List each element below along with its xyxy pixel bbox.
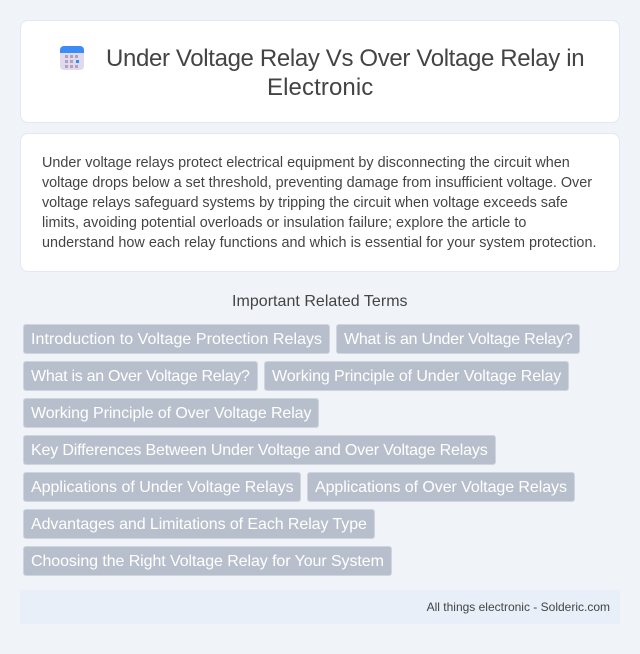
tag [23,398,319,428]
tag: Applications of Under Voltage Relays [31,479,294,496]
intro text: voltage drops below a set threshold, preventing damage from insufficient voltage. Over [42,175,592,191]
tag: Working Principle of Under Voltage Relay [272,368,561,385]
tag: What is an Over Voltage Relay? [31,368,250,385]
tag: Advantages and Limitations of Each Relay Type [31,516,367,533]
intro text: limits, avoiding potential overloads or insulation failure; explore the article to [42,215,526,231]
tag: Choosing the Right Voltage Relay for Your System [31,553,384,570]
tag: Key Differences Between Under Voltage and Over Voltage Relays [31,442,488,459]
section heading: Important Related Terms [232,293,408,310]
title line 2: Electronic [267,74,373,101]
intro text: Under voltage relays protect electrical equipment by disconnecting the circuit when [42,155,570,171]
intro text: understand how each relay functions and which is essential for your system protection. [42,235,597,251]
title card [20,20,620,123]
intro card [20,133,620,272]
intro text: voltage relays safeguard systems by tripping the circuit when voltage exceeds safe [42,195,568,211]
title line 1: Under Voltage Relay Vs Over Voltage Relay in [106,45,584,72]
tag [23,472,301,502]
tag: Introduction to Voltage Protection Relays [31,331,322,348]
tag [23,509,375,539]
tag [336,324,580,354]
tag [307,472,575,502]
tag [23,324,330,354]
tag [264,361,569,391]
tag [23,361,258,391]
tag: Applications of Over Voltage Relays [315,479,567,496]
tag: Working Principle of Over Voltage Relay [31,405,311,422]
tag: What is an Under Voltage Relay? [344,331,573,348]
tag [23,546,392,576]
term tags [23,324,580,576]
icon: calendar [60,46,84,70]
footer [20,590,620,624]
footer text: All things electronic - Solderic.com [427,600,610,614]
tag [23,435,496,465]
intro text [42,155,597,251]
